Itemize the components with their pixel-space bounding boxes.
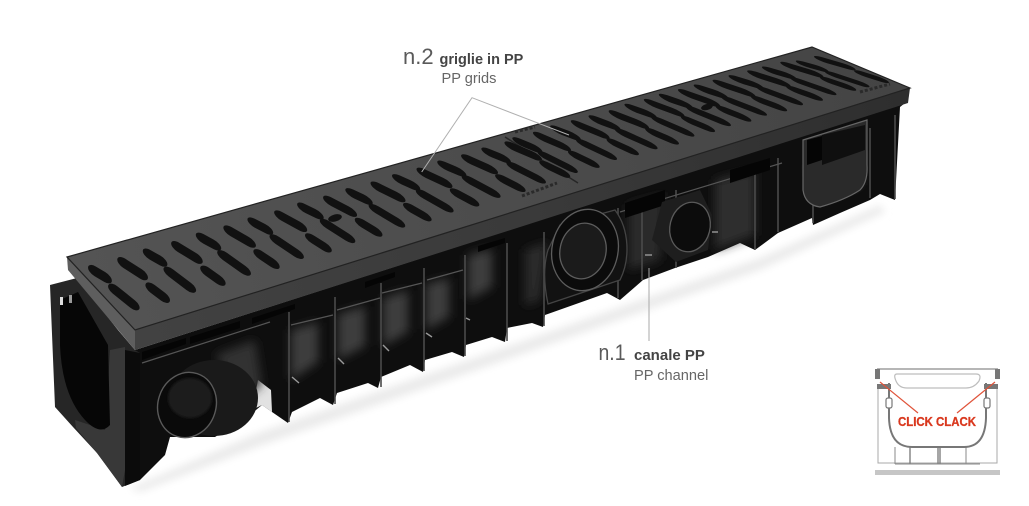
- channel body long side: [135, 103, 905, 480]
- callout: n.2 griglie in PP: [403, 44, 569, 172]
- vertical fins: [289, 115, 895, 422]
- red clip pointers: [880, 382, 995, 413]
- outer channel outline: [877, 369, 998, 464]
- centre round knock-out: [544, 203, 627, 304]
- second outlet tube: [652, 190, 715, 262]
- grate edge blocks: [875, 369, 1000, 389]
- right end U-profile: [803, 120, 867, 207]
- inner channel U profile: [889, 383, 986, 447]
- n.1 english label: PP channel: [634, 368, 708, 384]
- inset: click clack cross-section: [875, 369, 1000, 475]
- n.1 bold label: canale PP: [634, 347, 705, 364]
- n.2 label: n.2: [403, 44, 434, 69]
- n.2 leader lines: [422, 98, 569, 172]
- grate centre blobs: [327, 103, 714, 223]
- n.1 leader line: [648, 268, 650, 341]
- n.2 label: griglie in PP: [440, 52, 524, 68]
- callout: n.1 canale PP: [598, 268, 708, 384]
- grate top surface: [67, 47, 910, 330]
- lip underside clips: [142, 158, 770, 360]
- ground bar: [875, 470, 1000, 475]
- n.1 label: n.1: [598, 340, 626, 365]
- grate markings: [515, 84, 890, 196]
- body bay highlights: [215, 150, 862, 400]
- n.2 english label: PP grids: [442, 71, 496, 87]
- foot tabs: [292, 232, 718, 383]
- side clips: [886, 398, 990, 408]
- grate joint: [505, 137, 578, 183]
- click clack label: CLICK CLACK: [898, 414, 977, 429]
- grate side edge: [67, 257, 135, 350]
- left end cross-section panel: [50, 278, 140, 487]
- grate slot outline: [895, 374, 980, 388]
- white gap beside the outlet: [252, 380, 272, 412]
- horizontal ribs: [142, 163, 782, 363]
- grate front lip: [135, 88, 910, 350]
- product: drainage channel with grating: [50, 47, 910, 487]
- grate slots: [95, 58, 878, 308]
- ground shadow: [130, 205, 885, 492]
- left outlet tube: [149, 360, 258, 445]
